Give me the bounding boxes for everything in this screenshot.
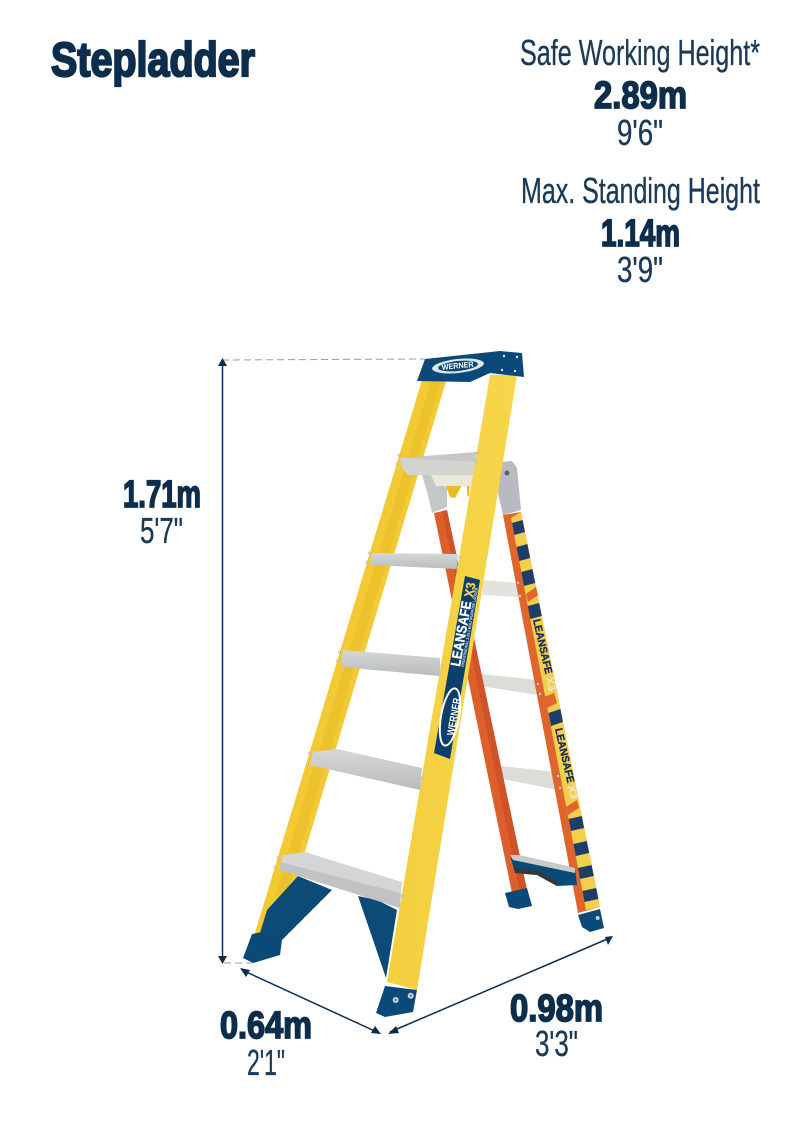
top cap: WERNER <box>441 360 474 372</box>
depth dimension: 0.98m <box>510 988 603 1030</box>
rear step <box>510 855 577 886</box>
height dimension <box>123 358 425 964</box>
top cap <box>417 351 524 382</box>
step 3 <box>341 650 440 676</box>
front rail label <box>434 576 480 759</box>
spec: safe working height: 2.89m <box>594 75 687 117</box>
title: Stepladder <box>51 34 255 87</box>
step 5 <box>280 852 402 908</box>
front rail label: LEANSAFE <box>447 600 474 668</box>
rear right rail: LEANSAFE <box>552 727 576 784</box>
spec: safe working height <box>520 32 760 153</box>
depth dimension: 3'3" <box>535 1023 578 1064</box>
spec: safe working height: 9'6" <box>617 112 663 153</box>
front rail label: X3 <box>461 581 479 599</box>
rear rungs <box>472 580 558 790</box>
rear left rail <box>434 510 527 893</box>
left brace <box>243 876 332 963</box>
rail text: LEANSAFE <box>530 618 554 675</box>
depth dimension <box>388 936 613 1064</box>
spec: max standing height: 1.14m <box>601 213 680 255</box>
front rail label: WERNER <box>445 697 464 737</box>
rear right rail: X3 <box>565 784 579 801</box>
right brace <box>358 896 397 978</box>
rivets <box>274 452 561 908</box>
step 4 <box>310 749 422 790</box>
ladder illustration <box>243 351 604 1017</box>
spec: max standing height <box>521 170 760 290</box>
steps <box>280 452 476 908</box>
width dimension: 2'1" <box>247 1042 285 1083</box>
front foot <box>376 986 417 1017</box>
hazard stripes <box>512 520 598 902</box>
hinge bracket <box>498 461 521 515</box>
rear right rail: X3 <box>543 676 557 693</box>
height dimension: 5'7" <box>140 510 183 551</box>
front right rail <box>387 375 517 990</box>
front left rail <box>255 378 447 935</box>
step hinge <box>422 475 473 513</box>
step 2 <box>370 553 458 569</box>
height dimension: 1.71m <box>123 474 201 516</box>
orange chevrons <box>526 587 579 815</box>
front rail label: PROFESSIONAL 3-IN-1 MULTIPURPOSE LADDER <box>460 587 479 667</box>
rear right rail <box>503 512 600 913</box>
spec: max standing height: 3'9" <box>617 249 663 290</box>
width dimension: 0.64m <box>220 1005 312 1047</box>
width dimension <box>220 968 381 1083</box>
rear feet <box>505 888 604 932</box>
step 1 <box>400 452 476 475</box>
